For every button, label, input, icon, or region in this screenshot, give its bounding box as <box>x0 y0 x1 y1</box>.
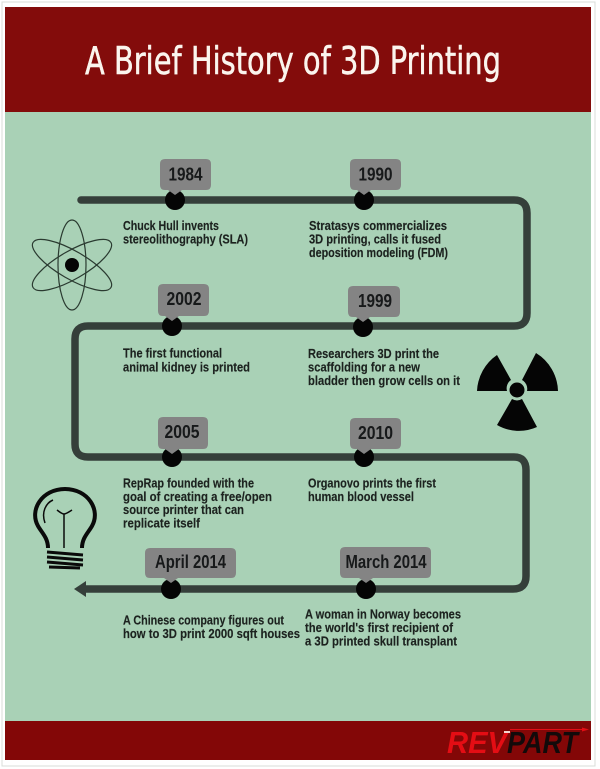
year label: April 2014: April 2014 <box>155 552 226 572</box>
text: 2010: human blood vessel <box>308 489 414 504</box>
timeline path with arrow <box>74 200 527 597</box>
text: 2005: goal of creating a free/open <box>123 489 272 504</box>
year label: 1999: 1999 <box>358 291 392 311</box>
text: March 2014: the world's first recipient of <box>305 620 454 635</box>
text: 2002: animal kidney is printed <box>123 360 250 374</box>
panel: green background <box>5 112 591 722</box>
text: 2005: replicate itself <box>123 516 201 530</box>
year label: March 2014: March 2014 <box>346 552 426 572</box>
text: March 2014: A woman in Norway becomes <box>305 606 461 622</box>
year label: 2005 <box>158 417 208 454</box>
icon: atom <box>26 220 118 310</box>
text: March 2014: a 3D printed skull transplant <box>305 634 458 648</box>
text: 2010 <box>308 476 437 504</box>
year label: 1990 <box>350 159 401 195</box>
title: A Brief History of 3D Printing <box>85 39 501 83</box>
year label: 2002 <box>158 284 209 321</box>
text: 1984 <box>123 218 248 246</box>
year label: April 2014 <box>145 548 236 583</box>
text: 1999: scaffolding for a new <box>308 360 421 374</box>
year label: 1990: 1990 <box>358 164 392 184</box>
text: 1999: bladder then grow cells on it <box>308 373 461 388</box>
text: 2002 <box>123 346 250 374</box>
text: 1990 <box>309 218 448 260</box>
logo: RevPart: REV <box>447 725 509 760</box>
text: 1990: deposition modeling (FDM) <box>309 245 448 260</box>
footer band <box>5 721 591 760</box>
year label: 2005: 2005 <box>164 422 200 442</box>
text: March 2014 <box>305 606 461 648</box>
text: 2002: The first functional <box>123 346 222 360</box>
text: 2005: source printer that can <box>123 502 244 517</box>
text: 1984: stereolithography (SLA) <box>123 232 248 246</box>
year label: 1984 <box>160 159 211 195</box>
icon: light bulb <box>35 489 95 568</box>
text: 1990: 3D printing, calls it fused <box>309 232 441 246</box>
text: April 2014 <box>123 612 300 641</box>
text: 1999 <box>308 346 461 388</box>
marker dots <box>161 190 376 599</box>
year label: 2002: 2002 <box>166 289 202 309</box>
year label: 1999 <box>348 286 400 322</box>
year label: March 2014 <box>340 547 431 583</box>
year label: 2010: 2010 <box>358 423 393 443</box>
header band <box>5 7 591 112</box>
year label: 2010 <box>350 418 401 454</box>
text: April 2014: how to 3D print 2000 sqft houses <box>123 626 300 641</box>
text: 2010: Organovo prints the first <box>308 476 437 490</box>
logo: RevPart: PART <box>507 725 581 760</box>
text: 1984: Chuck Hull invents <box>123 218 219 233</box>
year label: 1984: 1984 <box>168 164 202 184</box>
icon: radiation symbol <box>477 353 558 431</box>
text: 2005: RepRap founded with the <box>123 476 254 490</box>
text: April 2014: A Chinese company figures out <box>123 612 285 628</box>
logo: RevPart <box>447 725 589 760</box>
text: 1999: Researchers 3D print the <box>308 346 439 361</box>
text: 1990: Stratasys commercializes <box>309 218 447 233</box>
text: 2005 <box>123 476 272 530</box>
